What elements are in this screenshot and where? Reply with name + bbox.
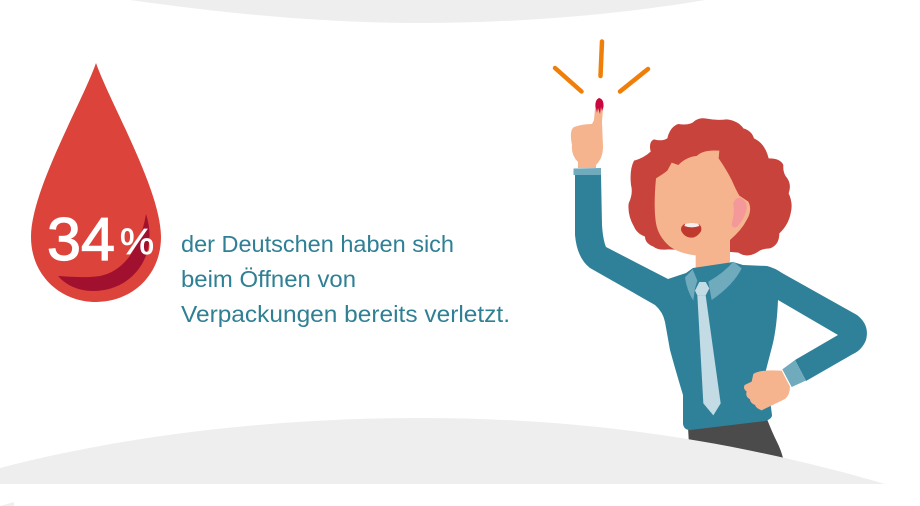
percent sign: % xyxy=(120,221,154,262)
collar right xyxy=(708,262,742,300)
statement text xyxy=(181,231,510,327)
bottom grey hill xyxy=(0,418,885,484)
line 2: beim Öffnen von xyxy=(181,266,356,292)
centre ray xyxy=(600,42,602,76)
woman upper part xyxy=(628,118,792,280)
blood drop with percentage xyxy=(31,63,161,302)
right fist xyxy=(744,370,790,410)
number 34: 34 xyxy=(47,206,115,273)
trousers xyxy=(688,419,783,458)
neck xyxy=(696,237,730,280)
hair xyxy=(628,118,792,255)
mouth xyxy=(681,223,701,238)
collar left xyxy=(685,269,697,301)
tie knot xyxy=(695,282,709,295)
left ray xyxy=(555,68,582,92)
right ray xyxy=(620,69,648,92)
bloody fingertip xyxy=(595,98,604,114)
pain rays xyxy=(555,42,648,92)
drop shape xyxy=(31,63,161,302)
teeth xyxy=(684,223,699,227)
line 1: der Deutschen haben sich xyxy=(181,231,454,257)
raised hand xyxy=(571,98,603,168)
sweater with raised arm and bent arm xyxy=(575,175,867,430)
top grey arc xyxy=(130,0,705,23)
drop shadow crescent xyxy=(58,214,149,291)
raised cuff xyxy=(574,168,601,175)
tie blade xyxy=(697,295,721,415)
ear xyxy=(732,198,747,227)
face xyxy=(655,150,750,256)
bottom corner fragment xyxy=(0,502,14,506)
right cuff xyxy=(782,360,806,387)
line 3: Verpackungen bereits verletzt. xyxy=(181,301,510,327)
collar and tie xyxy=(685,262,806,415)
value 34% xyxy=(47,206,154,273)
